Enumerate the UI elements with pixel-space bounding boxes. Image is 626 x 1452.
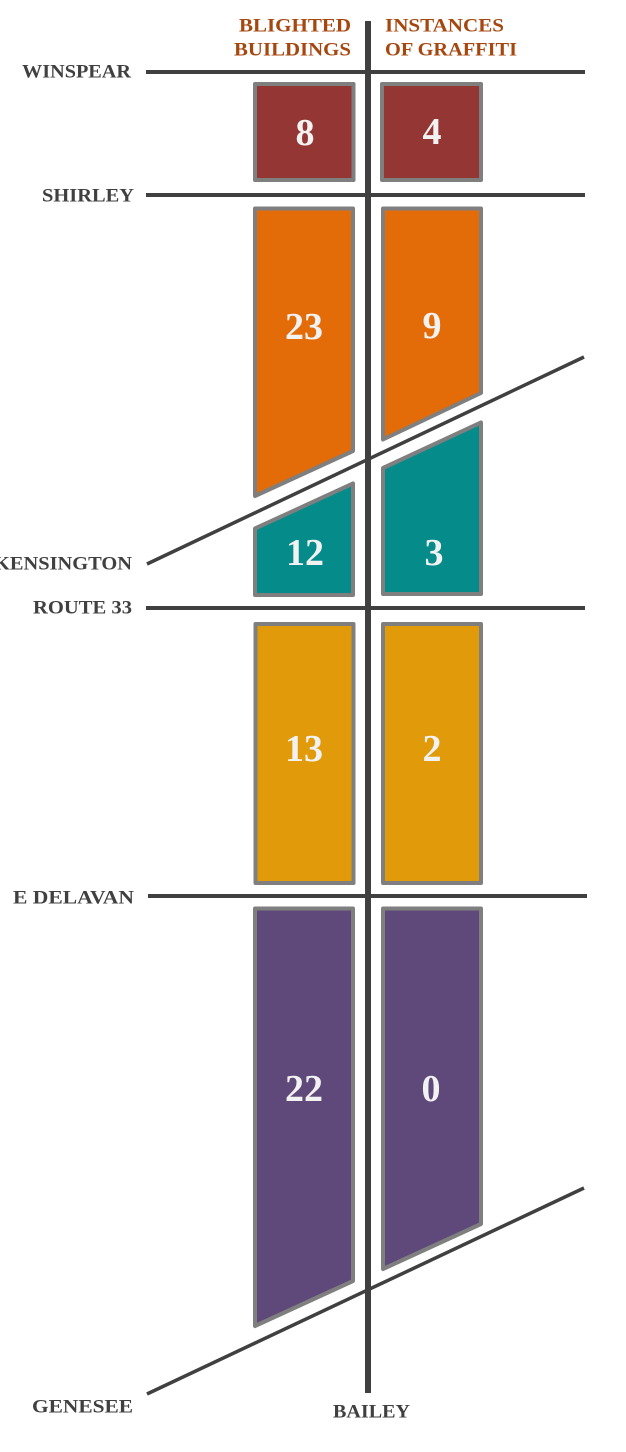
heading: instances of graffiti: INSTANCES: [385, 16, 504, 36]
segment: Route 33 to E Delavan, blighted buildings: 13: [285, 728, 323, 770]
segment: Kensington to Route 33, blighted buildings: 12: [286, 532, 324, 574]
heading: instances of graffiti: OF GRAFFITI: [385, 40, 517, 60]
label: Bailey: BAILEY: [333, 1402, 411, 1422]
segment: Route 33 to E Delavan, graffiti: [383, 624, 481, 883]
segment: Kensington to Route 33, graffiti: 3: [424, 532, 444, 574]
road: Bailey: [365, 21, 371, 1393]
heading: blighted buildings: BUILDINGS: [234, 40, 351, 60]
label: Winspear: WINSPEAR: [22, 62, 132, 82]
segment: Shirley to Kensington, graffiti: [383, 208, 481, 440]
heading: blighted buildings: [234, 16, 351, 60]
label: Route 33: ROUTE 33: [33, 598, 132, 618]
road: Genesee: [147, 1188, 584, 1394]
segment: Kensington to Route 33, blighted buildings: [255, 484, 353, 595]
segment: Shirley to Kensington, graffiti: 9: [422, 305, 442, 347]
road: E Delavan: [148, 894, 587, 898]
segment: E Delavan to Genesee, graffiti: [383, 908, 481, 1269]
road: Route 33: [146, 606, 585, 610]
label: Shirley: SHIRLEY: [42, 186, 135, 206]
segment: Winspear to Shirley, graffiti: 4: [422, 111, 442, 153]
segment: Winspear to Shirley, blighted buildings: 8: [296, 112, 314, 154]
segment: Shirley to Kensington, blighted buildings: [255, 208, 353, 496]
heading: instances of graffiti: [385, 16, 517, 60]
label: Genesee: GENESEE: [32, 1398, 133, 1418]
label: E Delavan: E DELAVAN: [13, 888, 135, 908]
road: Shirley: [146, 193, 585, 197]
segment: E Delavan to Genesee, graffiti: 0: [422, 1068, 440, 1110]
road: Kensington: [147, 357, 584, 564]
road: Winspear: [146, 70, 585, 74]
segment: Shirley to Kensington, blighted buildings: 23: [285, 306, 323, 348]
segment: Route 33 to E Delavan, graffiti: 2: [422, 728, 442, 770]
segment: E Delavan to Genesee, blighted buildings: [255, 908, 353, 1326]
heading: blighted buildings: BLIGHTED: [239, 16, 351, 36]
segment: Route 33 to E Delavan, blighted buildings: [256, 624, 354, 883]
segment: E Delavan to Genesee, blighted buildings: 22: [285, 1068, 323, 1110]
segment: Winspear to Shirley, graffiti: [382, 84, 481, 180]
segment: Winspear to Shirley, blighted buildings: [255, 84, 354, 180]
segment: Kensington to Route 33, graffiti: [383, 422, 481, 594]
